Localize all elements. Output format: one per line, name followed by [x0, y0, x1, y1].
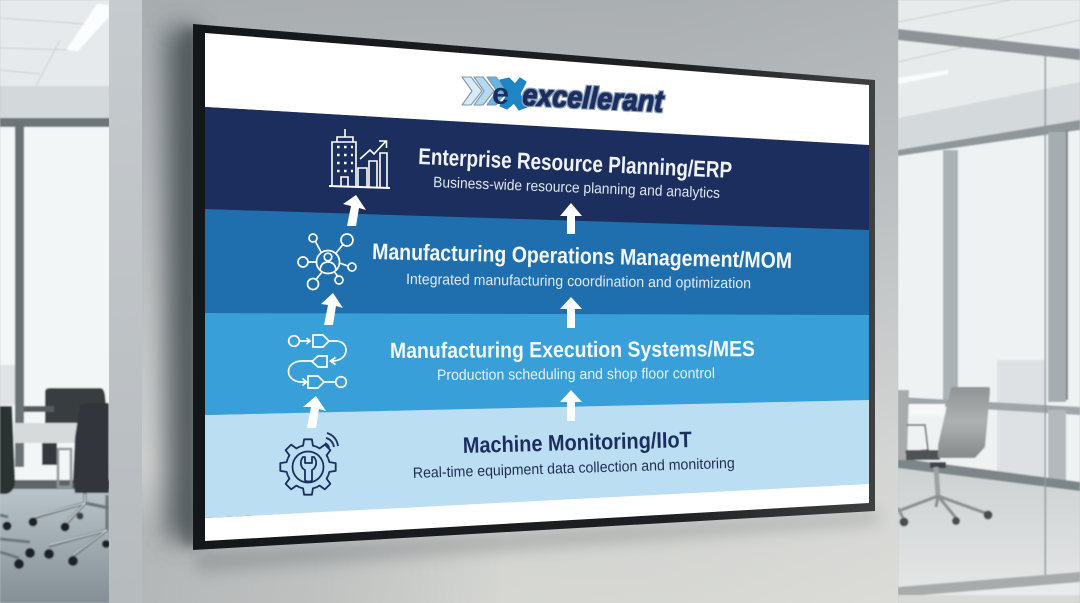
- logo chevrons: [462, 77, 527, 110]
- band: ERP: [205, 107, 869, 231]
- logo e letter: e: [492, 76, 509, 111]
- icon: process flow: [288, 335, 346, 388]
- background: right office room: [898, 0, 1080, 603]
- icon: connected network with person: [298, 234, 356, 290]
- logo wordmark: excellerant: [522, 77, 666, 119]
- arrow: center machine to MES: [560, 390, 582, 421]
- arrow: left MES to MOM: [321, 293, 343, 325]
- white header band: [205, 33, 869, 146]
- text: MOM description: Integrated manufacturing coordination and optimization: [406, 271, 751, 292]
- display frame: [193, 24, 875, 550]
- band: machine monitoring: [205, 400, 869, 518]
- band: MES: [205, 313, 869, 415]
- logo: excellerant: [462, 76, 666, 119]
- arrow: left machine to MES: [303, 396, 326, 428]
- screen panel: [205, 33, 869, 541]
- icon: building and growth chart: [329, 129, 390, 188]
- text: machine monitoring description: Real-time equipment data collection and monitoring: [413, 455, 735, 482]
- arrow: left MOM to ERP: [343, 195, 366, 226]
- white footer band: [205, 484, 869, 541]
- arrow: center MOM to ERP: [560, 203, 582, 234]
- heading: ERP: Enterprise Resource Planning/ERP: [418, 143, 733, 183]
- heading: MOM: Manufacturing Operations Management/MOM: [372, 239, 792, 273]
- text: MES description: Production scheduling and shop floor control: [437, 365, 715, 384]
- band: MOM: [205, 209, 869, 316]
- heading: MES: Manufacturing Execution Systems/MES: [390, 336, 755, 363]
- heading: machine monitoring: Machine Monitoring/IIoT: [462, 427, 692, 458]
- icon: gear with wrench and signal: [280, 433, 338, 495]
- arrow: center MES to MOM: [560, 297, 582, 328]
- background: left office room: [0, 0, 110, 603]
- text: ERP description: Business-wide resource planning and analytics: [433, 174, 720, 202]
- background: wall and pillar: [109, 0, 898, 603]
